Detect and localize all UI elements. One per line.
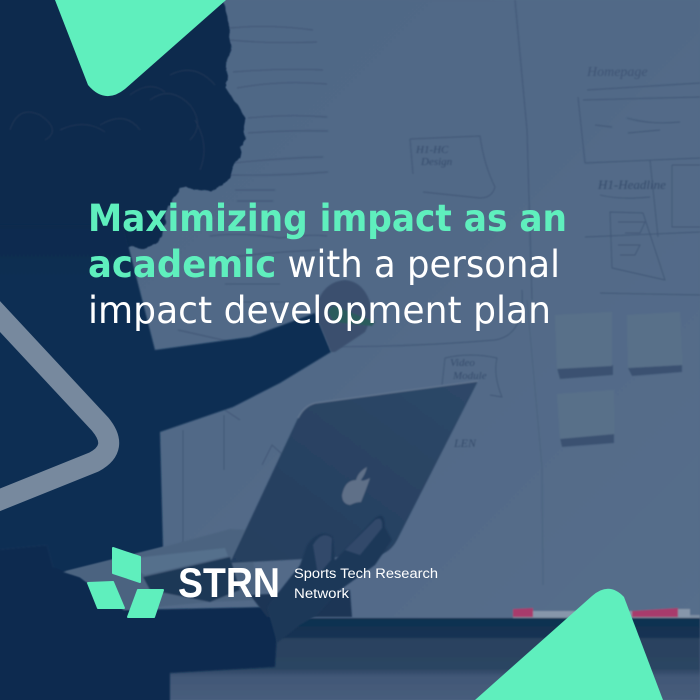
handwriting on the whiteboard: H1-HC <box>415 144 449 156</box>
title: Maximizing impact as an <box>88 197 567 240</box>
logo tagline: Network <box>294 586 349 601</box>
handwriting on the whiteboard: Design <box>420 156 453 168</box>
logo <box>88 548 438 617</box>
laptop lid <box>230 381 478 563</box>
accent triangle top <box>55 0 226 96</box>
apple logo <box>342 467 370 505</box>
person: hair <box>0 0 247 250</box>
logo tagline <box>294 566 438 601</box>
laptop base <box>63 529 260 610</box>
handwriting on the whiteboard: Video <box>450 357 475 369</box>
logo mark <box>88 548 163 617</box>
whiteboard sketches <box>178 0 700 585</box>
laptop <box>63 381 478 617</box>
title: academic with a personal <box>88 243 560 286</box>
markers on tray <box>513 608 700 618</box>
person: body and arms <box>0 225 331 700</box>
handwriting on the whiteboard <box>415 65 666 450</box>
sticky notes <box>555 312 683 447</box>
floor and tray <box>165 618 700 700</box>
title: impact development plan <box>88 289 551 332</box>
logo wordmark: STRN <box>178 559 280 606</box>
hand and marker on whiteboard <box>315 280 375 352</box>
accent triangle bottom right <box>475 589 663 700</box>
handwriting on the whiteboard: LEN <box>453 436 477 450</box>
handwriting on the whiteboard: Module <box>452 370 487 382</box>
logo tagline: Sports Tech Research <box>294 566 438 581</box>
decorative triangle outline <box>0 308 109 503</box>
title <box>88 197 567 332</box>
handwriting on the whiteboard: H1-Headline <box>597 177 666 192</box>
hand holding laptop <box>267 515 392 643</box>
handwriting on the whiteboard: Homepage <box>586 65 648 80</box>
